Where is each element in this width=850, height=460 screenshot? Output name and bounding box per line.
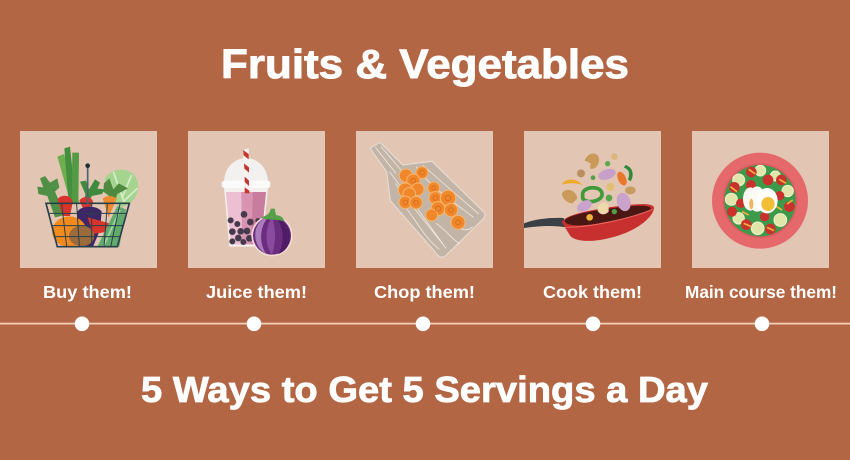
icon: basket of vegetables [37,147,138,247]
label: buy them: Buy them! [43,282,132,302]
panel: chop them [356,131,493,268]
timeline [0,316,850,331]
label: juice them: Juice them! [206,282,307,302]
label: cook them: Cook them! [543,282,642,302]
icon: frying pan with tossed vegetables [524,153,654,241]
subtitle: 5 Ways to Get 5 Servings a Day [141,369,709,410]
icon: salad plate with egg [712,153,808,249]
panel: main course them [692,131,829,268]
panel: buy them [20,131,157,268]
label: main course them: Main course them! [685,282,837,302]
icon: cutting board with carrot slices [370,142,485,257]
panel: cook them [524,131,661,268]
label: chop them: Chop them! [374,282,475,302]
title: Fruits & Vegetables [221,41,629,87]
panel: juice them [188,131,325,268]
icon: bubble tea and mangosteen [222,148,293,256]
